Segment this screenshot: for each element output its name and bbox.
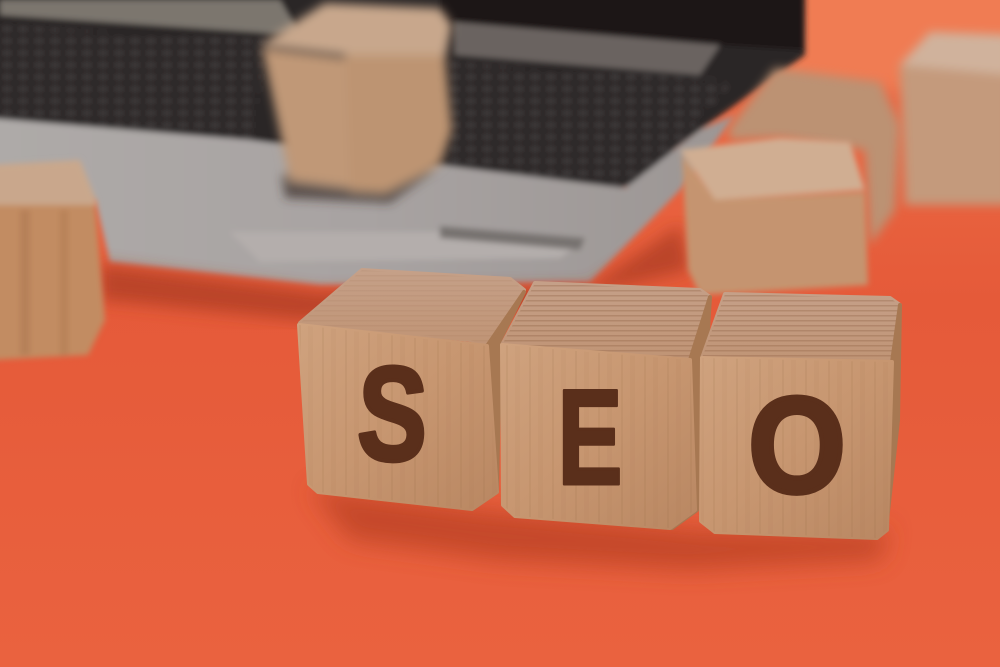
block: E: [502, 283, 710, 528]
side face: [672, 297, 710, 528]
side face: [472, 292, 524, 509]
front face: [502, 345, 695, 528]
block: S: [299, 270, 524, 509]
block: blurred top center on laptop: [260, 3, 452, 203]
top face: [300, 270, 524, 345]
grain on front face: [502, 345, 695, 528]
laptop: blurred background laptop: [0, 0, 805, 285]
block: blurred far right: [900, 32, 1000, 205]
side face: [886, 305, 900, 530]
grain on front face: [701, 358, 892, 538]
block: O: [701, 294, 900, 538]
block: blurred left edge: [0, 160, 105, 360]
shadow: beneath SEO blocks: [310, 488, 900, 570]
block: blurred upper right: [728, 68, 900, 245]
top face: [502, 283, 710, 358]
front face: [299, 325, 497, 509]
background: brighter top right corner: [780, 0, 1000, 90]
rings on top face: [502, 283, 710, 358]
letter O: O: [748, 369, 846, 521]
top face: [702, 294, 900, 362]
front face: [701, 358, 892, 538]
rings on top face: [300, 270, 524, 345]
letter S: S: [355, 338, 430, 490]
letter E: E: [557, 362, 623, 514]
block: blurred right middle: [680, 138, 868, 295]
shadow: under laptop: [100, 225, 690, 320]
grain on front face: [299, 325, 497, 509]
rings on top face: [702, 294, 900, 362]
